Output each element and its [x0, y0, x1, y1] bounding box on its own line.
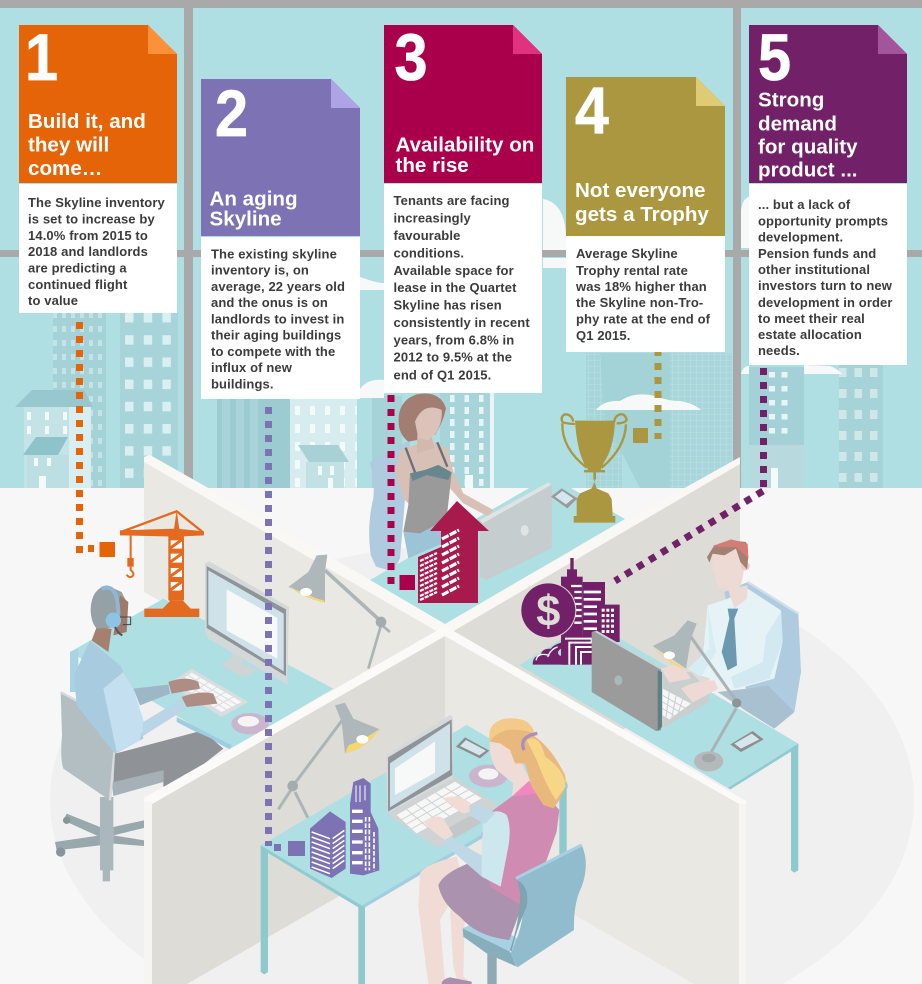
mouse on pad: [469, 765, 508, 787]
man in shirt and tie: [688, 539, 794, 729]
laptop lid: [480, 482, 552, 580]
woman at front desk: [386, 715, 586, 984]
card 1 body text: are predicting a: [28, 260, 127, 276]
card 5 body text: estate allocation: [758, 327, 862, 342]
card 2 fold: [331, 79, 360, 108]
card 3 body text: lease in the Quartet: [394, 280, 517, 295]
monitor: [205, 561, 289, 685]
card 4 number: 4: [575, 75, 609, 148]
card 3 body text: end of Q1 2015.: [394, 368, 491, 382]
card 2 body text: average, 22 years old: [211, 279, 345, 294]
card 5 heading: product ...: [758, 158, 858, 182]
card 3 fold: [513, 25, 542, 54]
card 2 heading: Skyline: [210, 208, 282, 230]
lamp: [288, 555, 390, 669]
dotted connector 2: [268, 407, 305, 856]
icon: twin buildings: [288, 778, 379, 878]
sleeve and arm: [443, 835, 483, 877]
card 2 body text: and the onus is on: [211, 295, 328, 310]
card 2 header: [201, 79, 360, 236]
laptop: [386, 715, 498, 848]
card 1 body text: is set to increase by: [28, 212, 155, 226]
chair: [369, 440, 410, 572]
right cubicle: [519, 539, 801, 873]
woman at back desk: [369, 394, 577, 580]
card 3 body text: years, from 6.8% in: [394, 332, 514, 348]
window frame: [0, 0, 922, 488]
card 5 heading: demand: [758, 112, 837, 136]
icon: dollar city: $: [536, 588, 560, 636]
card 3 body text: consistently in recent: [394, 315, 530, 330]
wall top strips: [144, 626, 746, 810]
panel: card 2: [201, 77, 360, 399]
neck and face: [490, 740, 530, 797]
city skyline: [15, 197, 883, 488]
card 2 body box: [201, 237, 360, 399]
card 2 heading: An aging: [210, 188, 298, 210]
card 3 body text: Skyline has risen: [394, 298, 502, 312]
card 5 body text: other institutional: [758, 262, 870, 277]
card 1 body text: continued flight: [28, 277, 128, 292]
lower left wall: [152, 636, 445, 984]
panel: card 5: [749, 21, 907, 365]
card 1 body text: 14.0% from 2015 to: [28, 228, 148, 243]
card 4 body text: Average Skyline: [576, 246, 678, 261]
card 4 heading: gets a Trophy: [575, 203, 709, 226]
icon: dollar city: [520, 558, 620, 665]
card 3 body text: Tenants are facing: [394, 193, 510, 208]
vest: [403, 465, 452, 533]
building: left towers: [53, 312, 178, 488]
card 2 body text: landlords to invest in: [211, 312, 344, 326]
card 3 number: 3: [394, 21, 428, 95]
desk: [70, 599, 333, 749]
card 1 fold: [148, 25, 177, 54]
icon: crane: [120, 510, 204, 617]
card 5 body text: ... but a lack of: [758, 197, 851, 212]
laptop: [592, 630, 718, 731]
clouds: [360, 197, 842, 410]
card 2 body text: The existing skyline: [211, 246, 337, 262]
card 4 body text: was 18% higher than: [575, 279, 707, 294]
card 4 fold: [696, 77, 725, 106]
card 5 body text: needs.: [758, 343, 800, 358]
card 5 heading: for quality: [758, 136, 858, 158]
card 5 body text: development in order: [758, 295, 893, 310]
hair: [489, 718, 566, 808]
card 5 body text: investors turn to new: [758, 278, 893, 293]
panel: card 3: [384, 21, 542, 393]
mouse on pad: [231, 713, 269, 734]
card 3 heading: the rise: [396, 154, 469, 177]
legs: [418, 857, 463, 984]
dotted connector 4: [633, 352, 658, 443]
card 1 heading: Build it, and: [28, 110, 146, 133]
card 1 number: 1: [25, 21, 58, 95]
card 4 heading: Not everyone: [575, 179, 705, 202]
desk leg: [791, 744, 798, 873]
phone: [551, 488, 577, 508]
card 5 body text: development.: [758, 230, 843, 244]
building: behind woman: [372, 393, 494, 488]
floor ellipse: [50, 544, 914, 984]
cubicle front walls: [144, 626, 746, 984]
lamp: [653, 620, 741, 771]
skirt: [438, 863, 522, 940]
card 3 header: [384, 25, 542, 183]
shoe: [442, 977, 472, 984]
chair back: [511, 845, 586, 967]
phone: [730, 731, 764, 752]
desk: [519, 621, 798, 788]
hands: [423, 816, 453, 840]
panel: card 1: [19, 21, 177, 313]
card 3 body text: Available space for: [394, 263, 514, 278]
card 5 heading: Strong: [758, 88, 824, 112]
icon: trophy: [562, 414, 627, 523]
card 5 fold: [878, 25, 907, 54]
bottom desk with figure: [261, 703, 568, 984]
card 1 body text: The Skyline inventory: [28, 195, 166, 210]
card 2 body text: buildings.: [211, 376, 274, 392]
back cubicle desk: [370, 476, 625, 624]
cubicle back walls: [144, 455, 740, 832]
face: [415, 408, 442, 440]
card 4 body text: Q1 2015.: [576, 328, 630, 343]
card 4 body text: the Skyline non-Tro-: [576, 295, 703, 310]
card 2 body text: to compete with the: [211, 344, 335, 359]
card 2 body text: influx of new: [211, 360, 293, 375]
building: centre left: [217, 399, 357, 488]
card 5 number: 5: [758, 21, 791, 95]
card 1 body text: 2018 and landlords: [28, 244, 148, 259]
card 5 body text: Pension funds and: [758, 246, 876, 261]
chair seat: [463, 918, 520, 952]
houses: left: [15, 390, 93, 488]
card 2 body text: inventory is, on: [211, 262, 309, 278]
card 4 body box: [566, 236, 725, 352]
desk: [261, 725, 568, 905]
floor: [0, 488, 922, 984]
card 3 body text: 2012 to 9.5% at the: [394, 350, 512, 364]
desk legs: [261, 846, 268, 974]
card 1 body box: [19, 184, 177, 313]
chair: [55, 692, 163, 881]
building: glass tower: [586, 353, 732, 488]
skin: torso and arms: [395, 442, 493, 527]
card 5 body box: [749, 184, 907, 365]
card 1 heading: they will: [28, 134, 109, 156]
card 1 heading: come…: [28, 157, 102, 180]
card 2 body text: their aging buildings: [211, 328, 341, 342]
skirt: [403, 525, 447, 558]
phone: [456, 737, 489, 758]
dotted connector 3: [391, 395, 415, 590]
icon: arrow building: [418, 501, 489, 603]
card 5 header: [749, 25, 907, 183]
man with headset: [74, 585, 248, 787]
card 1 body text: to value: [28, 293, 78, 308]
dotted connector 5: [615, 368, 764, 581]
left cubicle: [55, 510, 390, 881]
chair back stem: [487, 950, 497, 984]
wall end caps: [144, 802, 152, 984]
card 1 header: [19, 25, 177, 183]
card 4 body text: Trophy rental rate: [576, 263, 688, 278]
lower right wall: [445, 636, 739, 984]
card 3 body text: increasingly: [394, 210, 471, 226]
neck: [417, 435, 434, 453]
card 5 body text: opportunity prompts: [758, 214, 888, 228]
card 3 body text: favourable: [394, 228, 460, 243]
card 3 body box: [384, 184, 542, 393]
card 4 header: [566, 77, 725, 236]
panel: card 4: [566, 75, 725, 352]
hair: [399, 394, 446, 442]
buildings: right: [749, 365, 883, 488]
card 4 body text: phy rate at the end of: [576, 312, 711, 326]
dotted connector 1: [80, 322, 115, 557]
chair: [724, 582, 801, 729]
card 3 heading: Availability on: [396, 134, 534, 156]
lamp: [278, 703, 380, 825]
sky background: [0, 0, 922, 490]
top: [482, 782, 559, 905]
card 5 body text: to meet their real: [758, 311, 865, 326]
card 2 number: 2: [215, 77, 248, 151]
card 3 body text: conditions.: [394, 246, 464, 260]
